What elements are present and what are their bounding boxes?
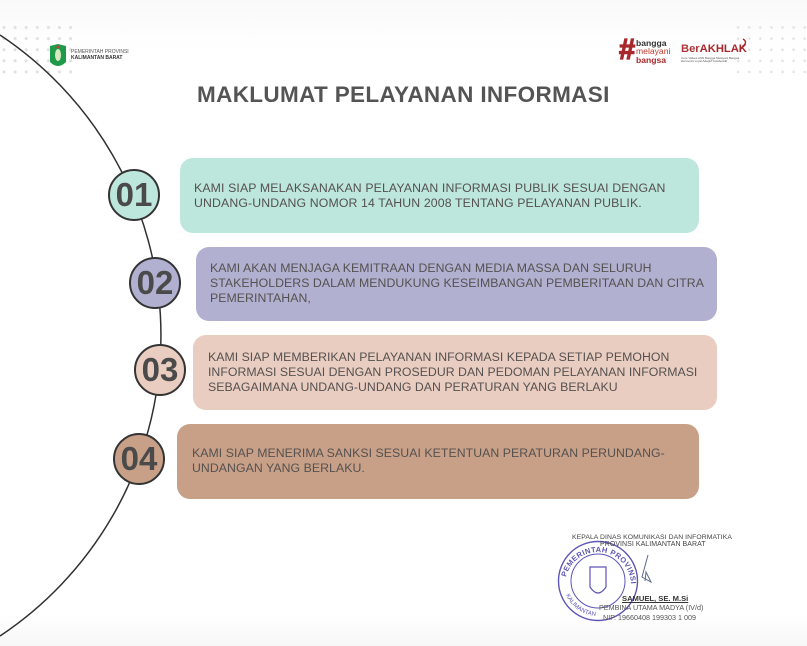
- number badge 02: 02: [137, 264, 173, 301]
- panel: item 2: STAKEHOLDERS DALAM MENDUKUNG KESEIMBANGAN PEMBERITAAN DAN CITRA: [210, 276, 704, 290]
- panel: item 3: [193, 335, 717, 410]
- panel: item 3: INFORMASI SESUAI DENGAN PROSEDUR DAN PEDOMAN PELAYANAN INFORMASI: [208, 365, 697, 379]
- number badge 03: [134, 344, 186, 396]
- logo: BerAKHLAK: [681, 38, 747, 63]
- panel: item 1: [180, 158, 699, 233]
- logo: Pemerintah Provinsi Kalimantan Barat: KALIMANTAN BARAT: [71, 54, 122, 60]
- number badge 02: [129, 257, 181, 309]
- panel: item 3: KAMI SIAP MEMBERIKAN PELAYANAN INFORMASI KEPADA SETIAP PEMOHON: [208, 350, 669, 364]
- logo: bangga melayani bangsa: bangsa: [636, 55, 666, 65]
- panel: item 1: UNDANG-UNDANG NOMOR 14 TAHUN 2008 TENTANG PELAYANAN PUBLIK.: [194, 196, 642, 210]
- title: MAKLUMAT PELAYANAN INFORMASI: [197, 82, 610, 107]
- panel: item 2: PEMERINTAHAN,: [210, 291, 311, 305]
- signature block: PROVINSI KALIMANTAN BARAT: [600, 541, 706, 548]
- number badge 03: 03: [142, 351, 178, 388]
- number badge 04: 04: [121, 440, 157, 477]
- panel: item 2: KAMI AKAN MENJAGA KEMITRAAN DENGAN MEDIA MASSA DAN SELURUH: [210, 261, 652, 275]
- official stamp: KALIMANTAN: [566, 594, 596, 616]
- official stamp: [558, 540, 638, 622]
- signature block: PEMBINA UTAMA MADYA (IV/d): [599, 603, 703, 612]
- logo: BerAKHLAK: Core Values ASN Bangga Melayani Bangsa: [681, 56, 739, 60]
- logo: Pemerintah Provinsi Kalimantan Barat: [50, 44, 129, 66]
- logo: BerAKHLAK: BerAKHLAK: [681, 43, 747, 55]
- signature block: NIP. 19660408 199303 1 009: [603, 613, 696, 622]
- panel: item 4: KAMI SIAP MENERIMA SANKSI SESUAI KETENTUAN PERATURAN PERUNDANG-: [192, 446, 665, 460]
- logo: Pemerintah Provinsi Kalimantan Barat: PEMERINTAH PROVINSI: [71, 49, 129, 55]
- signature scribble: [641, 555, 652, 584]
- panel: item 4: UNDANGAN YANG BERLAKU.: [192, 461, 365, 475]
- number badge 01: [108, 169, 160, 221]
- signature block: [558, 534, 732, 622]
- logo: bangga melayani bangsa: [618, 34, 670, 66]
- panel: item 3: SEBAGAIMANA UNDANG-UNDANG DAN PERATURAN YANG BERLAKU: [208, 380, 618, 394]
- number badge 04: [113, 433, 165, 485]
- signature block: SAMUEL, SE. M.Si: [622, 594, 688, 603]
- logo: bangga melayani bangsa: melayani: [636, 46, 670, 56]
- panel: item 2: [196, 247, 717, 321]
- panel: item 1: KAMI SIAP MELAKSANAKAN PELAYANAN INFORMASI PUBLIK SESUAI DENGAN: [194, 181, 666, 195]
- signature block: KEPALA DINAS KOMUNIKASI DAN INFORMATIKA: [572, 534, 732, 541]
- logo: bangga melayani bangsa: #: [619, 34, 635, 66]
- official stamp: PEMERINTAH PROVINSI: [561, 546, 636, 584]
- number badge 01: 01: [116, 176, 152, 213]
- logo: bangga melayani bangsa: bangga: [636, 38, 667, 48]
- panel: item 4: [177, 424, 699, 499]
- logo: BerAKHLAK: Harmonis Loyal Adaptif Kolaboratif: [681, 59, 727, 63]
